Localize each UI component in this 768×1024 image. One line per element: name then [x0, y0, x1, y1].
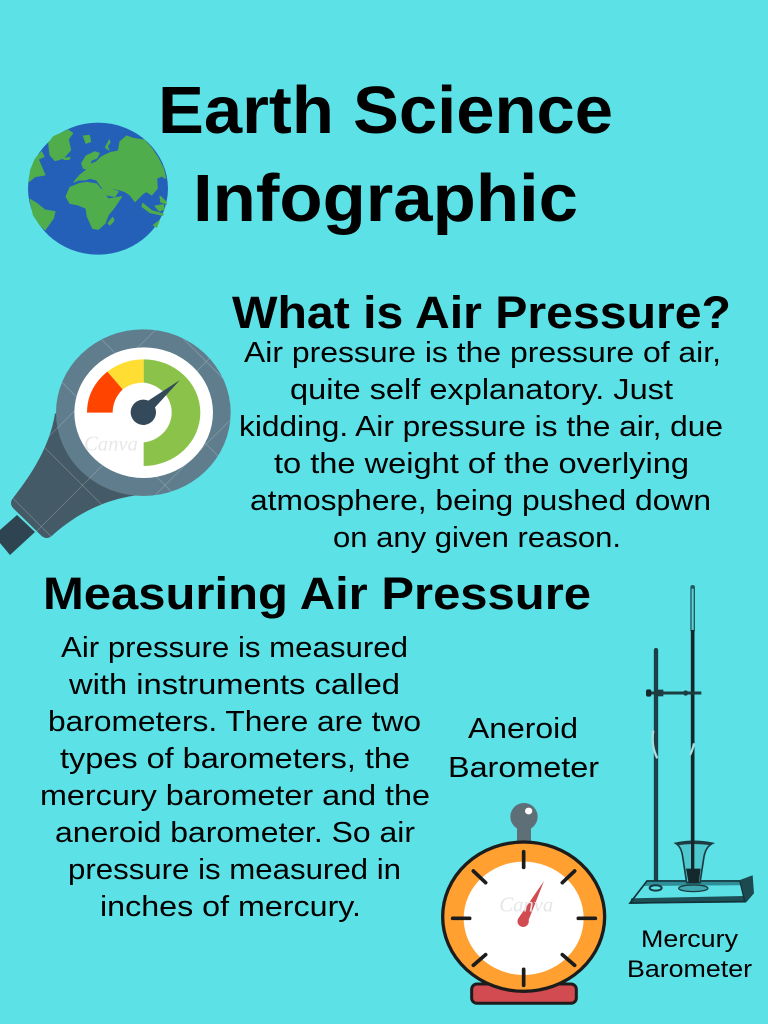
- text block: measuring description: [40, 632, 430, 923]
- icon: pressure gauge: Canva: [84, 434, 138, 456]
- icon: earth globe: [28, 123, 168, 255]
- text block: air pressure definition: on any given reason.: [333, 522, 621, 554]
- text block: measuring description: with instruments called: [68, 669, 400, 701]
- label: mercury barometer: [627, 926, 752, 983]
- text block: measuring description: types of barometers, the: [60, 743, 410, 775]
- text block: air pressure definition: Air pressure is the pressure of air,: [244, 337, 721, 369]
- text block: air pressure definition: kidding. Air pressure is the air, due: [239, 411, 723, 443]
- label: mercury barometer: Barometer: [627, 956, 752, 983]
- icon: aneroid barometer: [443, 803, 605, 1003]
- text block: air pressure definition: to the weight of the overlying: [274, 448, 689, 480]
- heading: what is air pressure: What is Air Pressure?: [232, 287, 731, 338]
- icon: mercury barometer: [630, 587, 754, 904]
- icon: aneroid barometer: Canva: [499, 895, 553, 917]
- label: aneroid barometer: Barometer: [448, 752, 600, 784]
- label: aneroid barometer: [448, 713, 600, 784]
- label: aneroid barometer: Aneroid: [468, 713, 578, 745]
- text block: measuring description: Air pressure is measured: [61, 632, 408, 664]
- label: mercury barometer: Mercury: [641, 926, 738, 953]
- text block: air pressure definition: atmosphere, being pushed down: [250, 485, 711, 517]
- text block: air pressure definition: quite self explanatory. Just: [290, 374, 673, 406]
- heading: measuring air pressure: Measuring Air Pressure: [43, 568, 591, 619]
- title: Infographic: [193, 161, 578, 236]
- text block: measuring description: barometers. There are two: [48, 706, 421, 738]
- text block: measuring description: aneroid barometer. So air: [55, 817, 416, 849]
- text block: air pressure definition: [239, 337, 723, 554]
- icon: pressure gauge: [0, 329, 231, 555]
- title: [158, 73, 613, 236]
- text block: measuring description: pressure is measured in: [68, 854, 401, 886]
- text block: measuring description: mercury barometer and the: [40, 780, 430, 812]
- text block: measuring description: inches of mercury.: [100, 891, 361, 923]
- title: Earth Science: [158, 73, 613, 148]
